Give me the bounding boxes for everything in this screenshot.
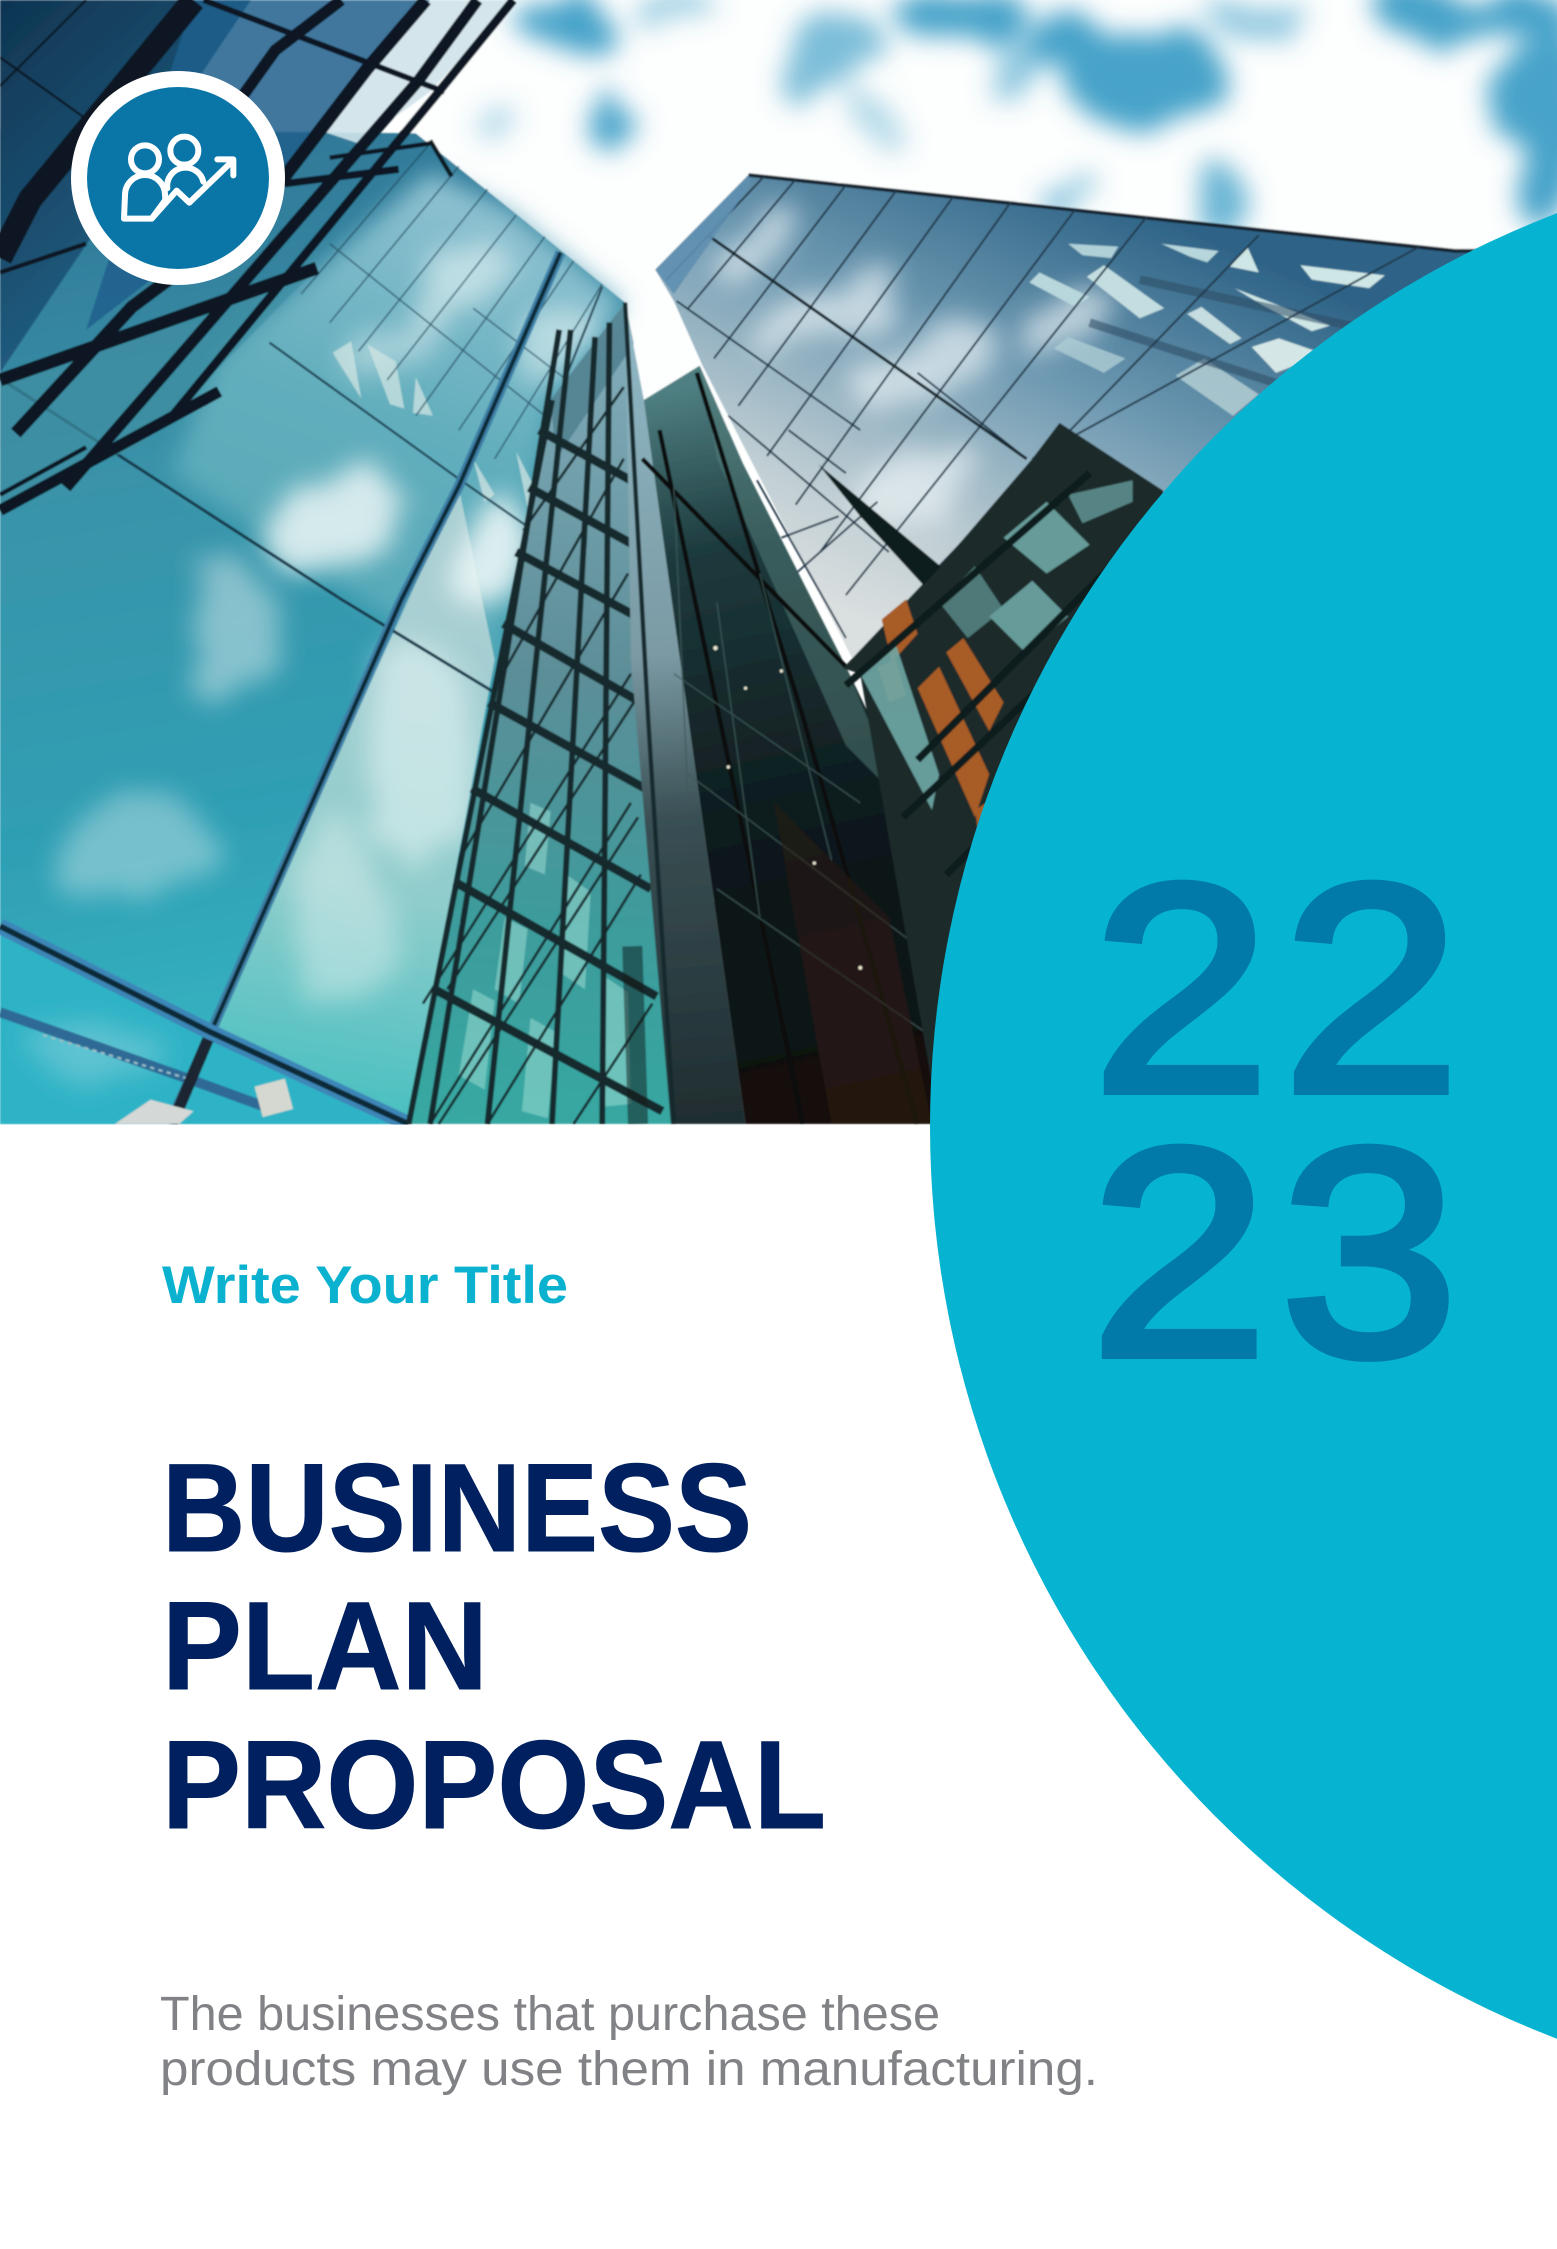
year line: 22: 22 — [1092, 822, 1460, 1154]
dark central column — [640, 365, 932, 1124]
sky with clouds — [401, 0, 1557, 430]
tower lattice — [409, 303, 674, 1124]
year line: 23: 23 — [1090, 1086, 1458, 1418]
description line 2: products may use them in manufacturing. — [160, 2043, 1098, 2096]
crane reflection — [0, 1012, 293, 1124]
year numbers 22 23 — [1090, 822, 1460, 1418]
left glass building — [0, 129, 860, 1124]
pale central glass strip — [625, 303, 746, 1124]
icon: people and rising arrow — [124, 137, 233, 219]
title line 2: PLAN — [162, 1577, 488, 1716]
description line 1: The businesses that purchase these — [160, 1988, 940, 2041]
top-left steel lattice — [0, 0, 513, 510]
right glass building — [654, 172, 1477, 660]
photo: glass skyscrapers seen from below — [0, 0, 1557, 1124]
icon badge: people with growth arrow — [71, 71, 285, 285]
description text — [160, 1988, 1098, 2096]
main title — [162, 1439, 826, 1855]
subtitle: Write Your Title — [162, 1256, 568, 1315]
title line 3: PROPOSAL — [162, 1716, 826, 1855]
glass mullions — [0, 250, 604, 1124]
cyan circle panel — [930, 148, 1557, 2104]
title line 1: BUSINESS — [162, 1439, 752, 1578]
reflected dark building with orange panels — [818, 422, 1164, 1082]
